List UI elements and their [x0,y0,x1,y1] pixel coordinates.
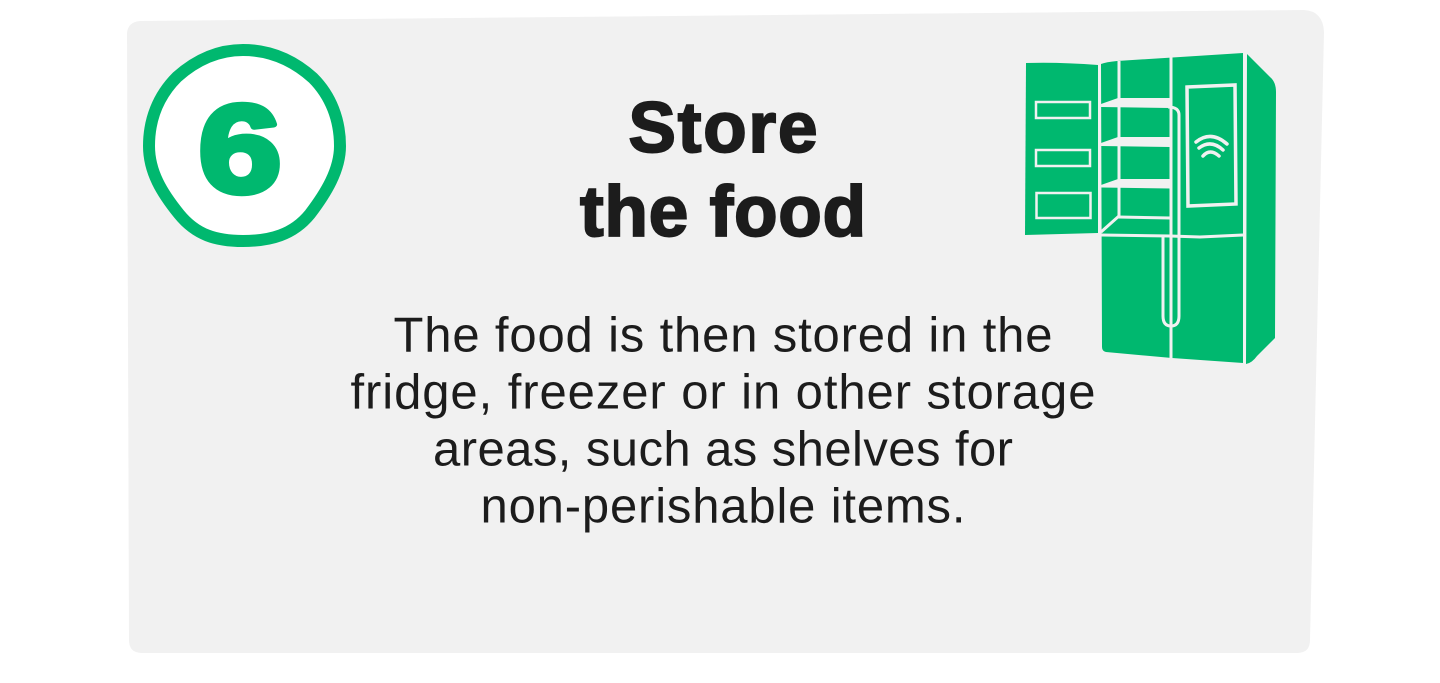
badge ring [149,50,340,241]
fridge body front [1101,53,1243,363]
badge: step number 6 [149,50,340,241]
fridge shelves [1101,98,1170,188]
body line 1: The food is then stored in the [394,308,1052,362]
heading [580,89,866,252]
body text [350,308,1096,534]
heading line 2: the food [580,173,866,252]
fridge interior and door lines [1101,57,1243,358]
heading line 1: Store [628,89,818,168]
icon: open smart fridge [1025,53,1276,364]
fridge left door [1025,63,1098,235]
body line 2: fridge, freezer or in other storage [350,366,1096,420]
body line 4: non-perishable items. [480,480,966,534]
fridge side panel [1246,54,1276,364]
step number: 6 [198,80,282,219]
panel: card background [127,10,1324,653]
body line 3: areas, such as shelves for [433,422,1013,476]
wifi symbol [1196,136,1227,156]
door compartments [1036,102,1090,218]
